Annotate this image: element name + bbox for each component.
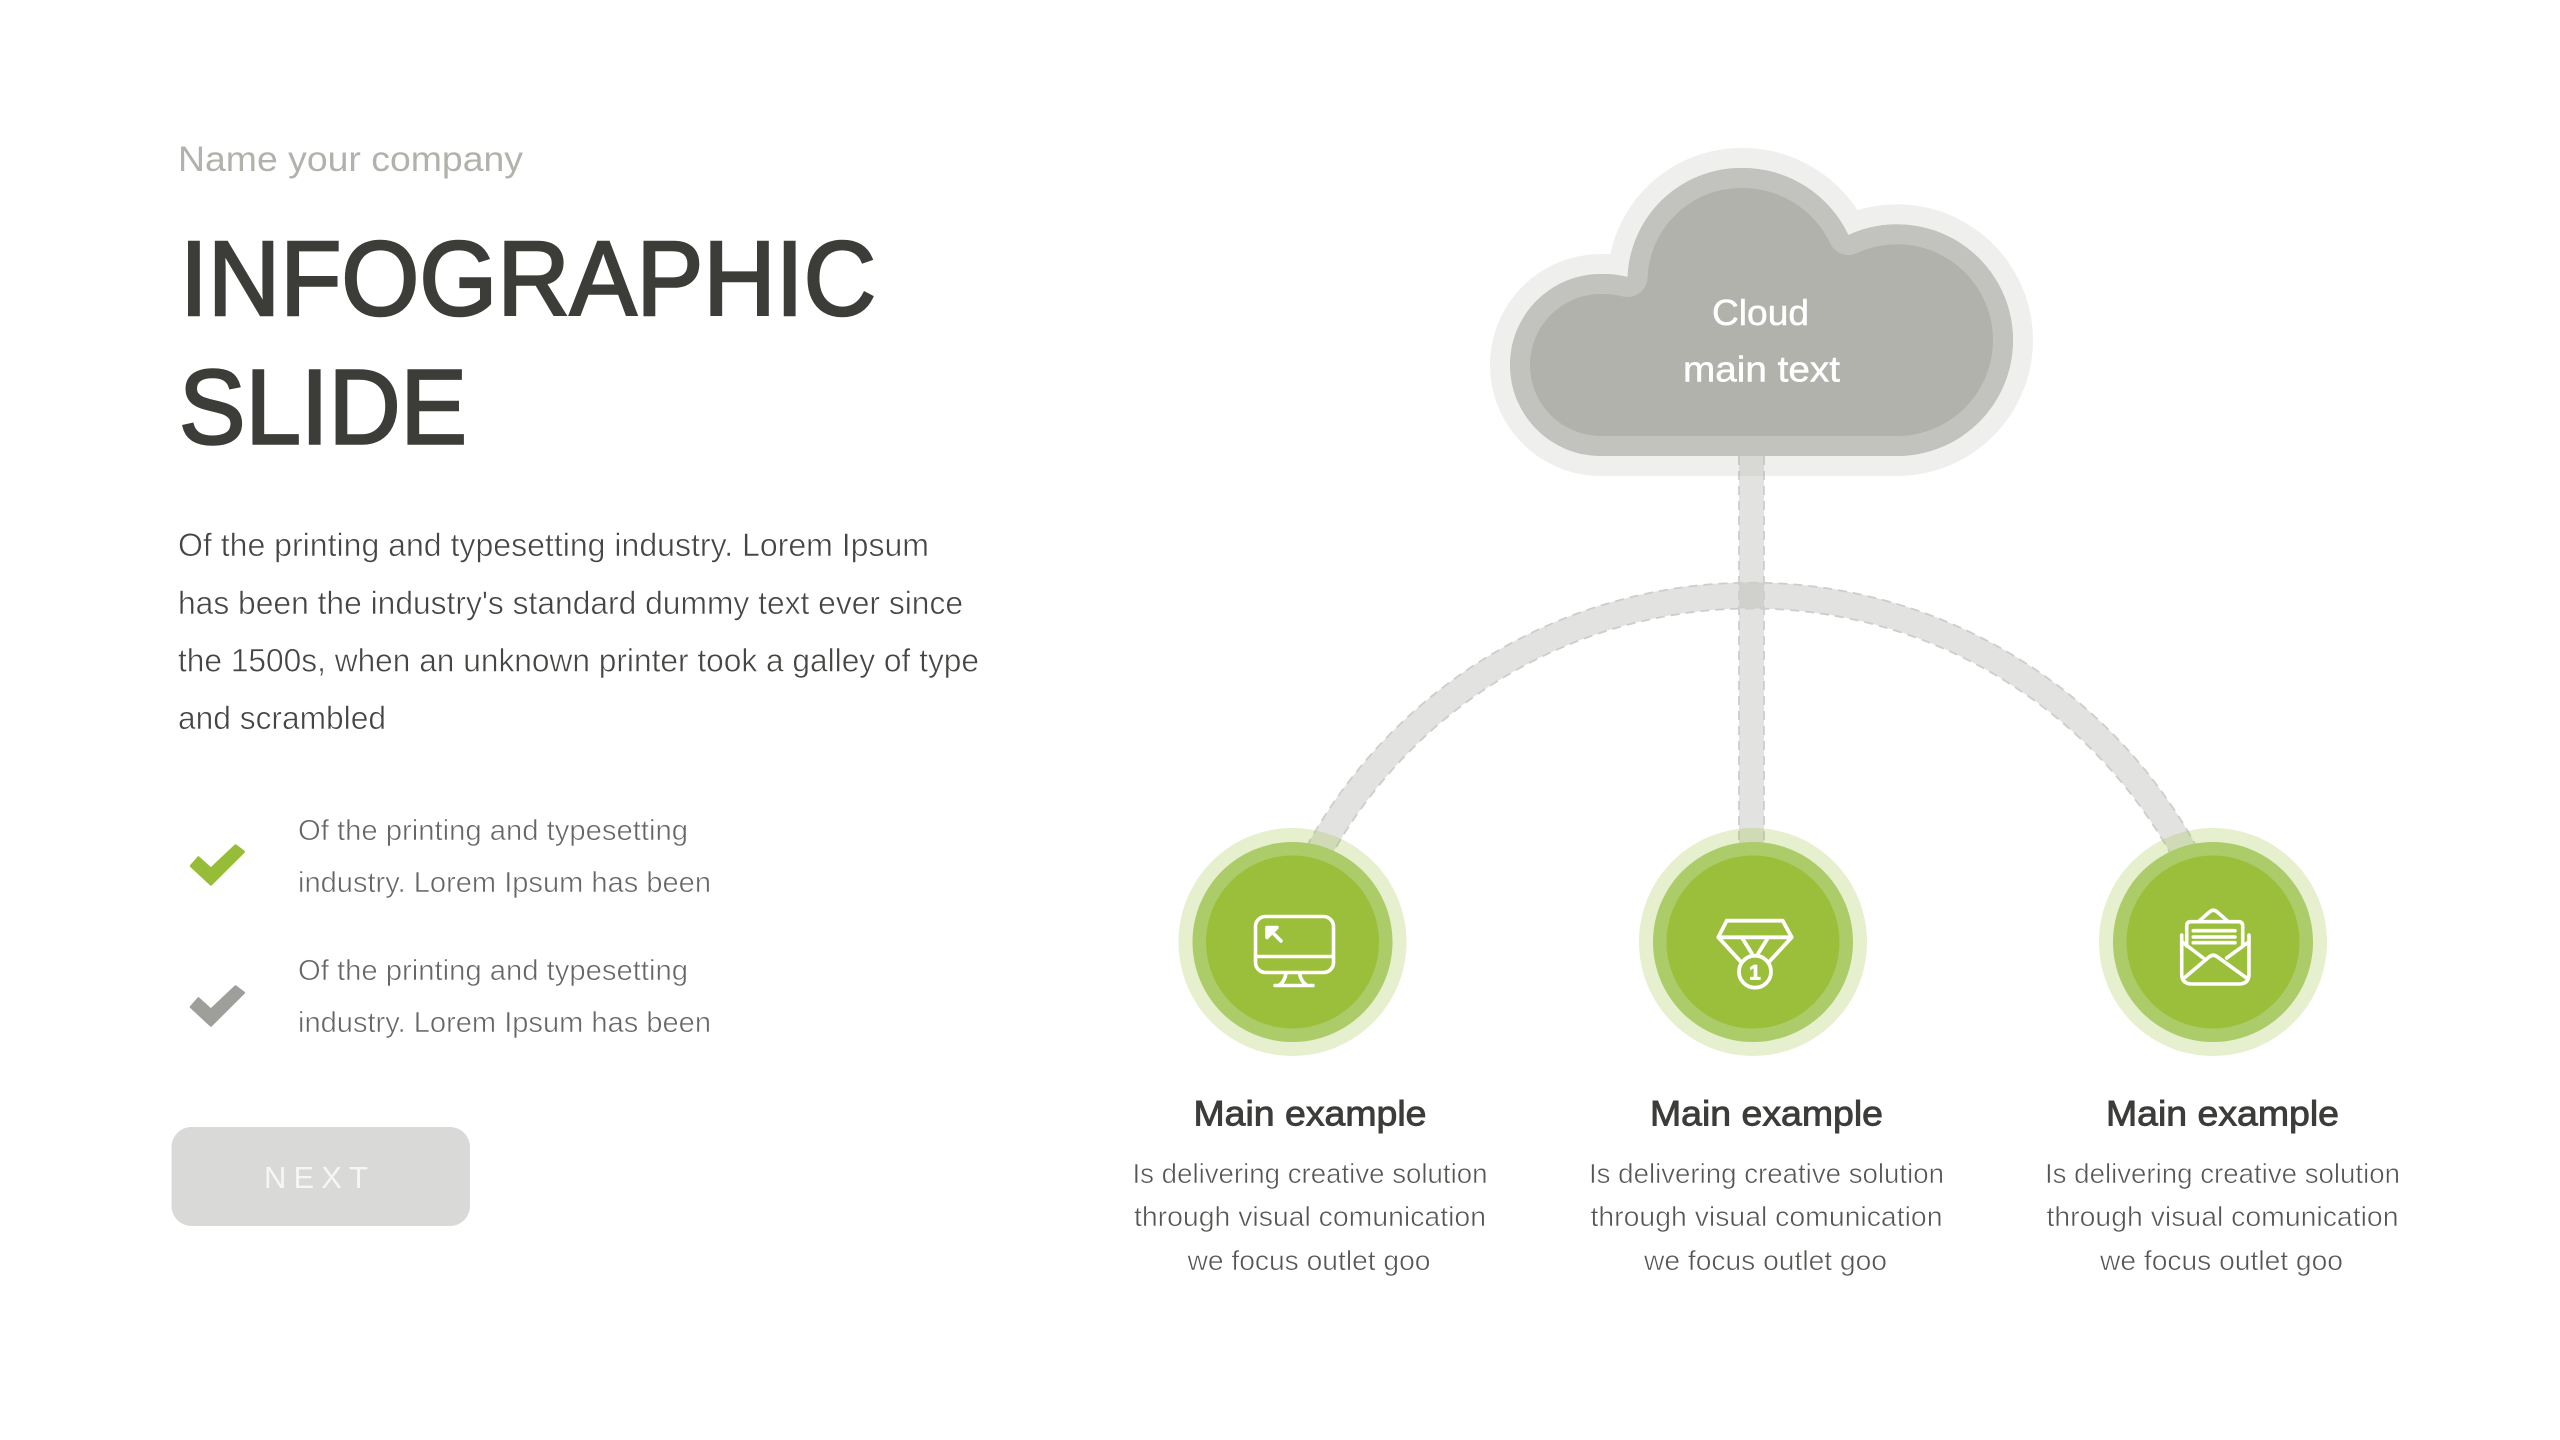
- next button: NEXT: [264, 1160, 368, 1195]
- column 2 text: Is delivering creative solution: [1589, 1158, 1944, 1189]
- title: SLIDE: [179, 348, 467, 466]
- column 3 text: [2045, 1094, 2400, 1276]
- checklist text 1: industry. Lorem Ipsum has been: [298, 867, 711, 899]
- checklist item 1: [191, 815, 711, 899]
- icon: medal: 1: [1749, 962, 1761, 984]
- checklist item 2: [191, 955, 711, 1039]
- column 2 text: we focus outlet goo: [1643, 1245, 1887, 1276]
- node 3: envelope: [2099, 828, 2327, 1056]
- checklist text 2: Of the printing and typesetting: [298, 955, 688, 987]
- node 1: monitor: [1178, 828, 1406, 1056]
- column 2 text: [1589, 1094, 1944, 1276]
- node 2: medal: [1639, 828, 1867, 1056]
- intro paragraph: and scrambled: [178, 700, 386, 736]
- checklist text 2: [298, 955, 711, 1039]
- icon: medal: [1718, 921, 1792, 988]
- column 1 text: we focus outlet goo: [1186, 1245, 1430, 1276]
- icon: monitor: [1256, 916, 1334, 986]
- title: [179, 220, 876, 466]
- cloud: [1510, 168, 2013, 456]
- column 1 text: Main example: [1194, 1094, 1426, 1134]
- column 1 text: through visual comunication: [1134, 1201, 1486, 1232]
- column 3 text: Is delivering creative solution: [2045, 1158, 2400, 1189]
- column 2 text: through visual comunication: [1590, 1201, 1942, 1232]
- column 1 text: Is delivering creative solution: [1132, 1158, 1488, 1189]
- intro paragraph: has been the industry's standard dummy text ever since: [178, 585, 963, 621]
- icon: green check: [191, 846, 244, 884]
- column 2 text: Main example: [1650, 1094, 1883, 1134]
- connectors: arc and vertical line: [1300, 456, 2204, 860]
- checklist text 1: [298, 815, 711, 899]
- checklist text 1: Of the printing and typesetting: [298, 815, 688, 847]
- intro paragraph: the 1500s, when an unknown printer took a galley of type: [178, 642, 979, 678]
- next button: [172, 1127, 470, 1226]
- checklist text 2: industry. Lorem Ipsum has been: [298, 1007, 711, 1039]
- icon: gray check: [191, 986, 244, 1026]
- intro paragraph: Of the printing and typesetting industry. Lorem Ipsum: [178, 527, 929, 563]
- column 1 text: [1132, 1094, 1488, 1276]
- cloud text: main text: [1683, 348, 1840, 390]
- column 3 text: we focus outlet goo: [2099, 1245, 2343, 1276]
- intro paragraph: [178, 527, 979, 736]
- cloud text: Cloud: [1712, 292, 1809, 333]
- column 3 text: Main example: [2106, 1094, 2339, 1134]
- column 3 text: through visual comunication: [2046, 1201, 2398, 1232]
- icon: envelope: [2182, 910, 2249, 984]
- cloud text: [1683, 292, 1840, 390]
- title: INFOGRAPHIC: [180, 220, 876, 338]
- company name: Name your company: [178, 139, 523, 179]
